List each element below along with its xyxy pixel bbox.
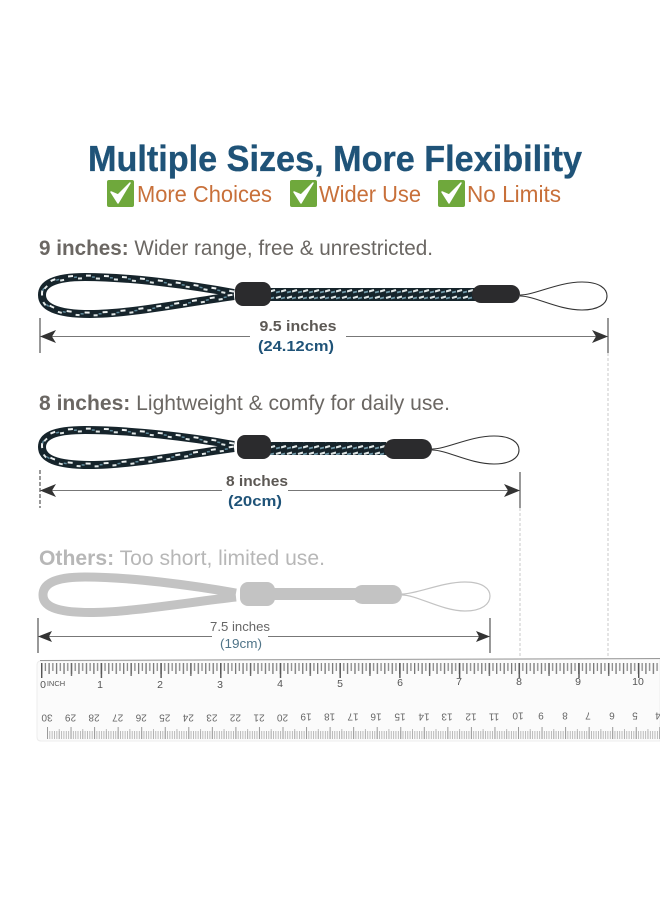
guide: dashed reference lines xyxy=(520,353,608,656)
inch scale numbers: 5 xyxy=(337,678,343,690)
centimetre scale numbers: 23 xyxy=(206,712,217,722)
centimetre scale numbers: 8 xyxy=(562,710,568,720)
centimetre scale numbers: 6 xyxy=(609,710,615,720)
icon: check wider use xyxy=(290,180,317,207)
panel: 9 inch strap xyxy=(39,237,608,355)
label: 7.5 inches xyxy=(210,619,271,653)
label: 9.5 inches: 9.5 inches xyxy=(260,318,336,335)
inch scale numbers xyxy=(40,676,644,691)
text: more choices: More Choices xyxy=(137,181,272,207)
icon: check more choices xyxy=(107,180,134,207)
ruler xyxy=(37,658,660,741)
centimetre scale numbers: 21 xyxy=(253,712,265,722)
heading: 8 inches: 8 inches: Lightweight & comfy for daily use. xyxy=(39,392,450,415)
inch scale numbers: 8 xyxy=(516,676,522,688)
inch scale numbers: 7 xyxy=(456,676,462,688)
text: wider use: Wider Use xyxy=(319,181,421,207)
strap: others xyxy=(43,577,490,612)
heading: 9 inches: 9 inches: Wider range, free & unrestricted. xyxy=(39,237,433,260)
strap: 8 inch xyxy=(42,429,519,466)
inch scale numbers: 3 xyxy=(217,679,223,691)
text: no limits: No Limits xyxy=(467,181,561,207)
inch scale numbers: 0 xyxy=(40,679,46,691)
centimetre scale numbers: 25 xyxy=(159,712,170,722)
centimetre scale numbers xyxy=(41,710,660,722)
panel: 8 inch strap xyxy=(39,392,520,510)
centimetre scale numbers: 12 xyxy=(465,710,477,722)
centimetre scale numbers: 19 xyxy=(300,710,312,722)
ruler body xyxy=(37,659,660,741)
dimension arrow: 9.5 inches xyxy=(40,318,608,353)
centimetre scale numbers: 13 xyxy=(441,710,453,722)
centimetre scale numbers: 16 xyxy=(370,710,382,722)
centimetre tick marks xyxy=(46,726,660,741)
subtitle benefits row xyxy=(107,180,561,207)
label: 8 inches: 8 inches xyxy=(226,473,288,490)
centimetre scale numbers: 29 xyxy=(65,712,76,722)
strap: 9 inch xyxy=(42,276,607,315)
inch scale numbers: 10 xyxy=(632,676,644,688)
inch scale numbers: INCH xyxy=(47,679,65,688)
label: 9.5 inches: (24.12cm) xyxy=(258,338,334,355)
label: 9.5 inches xyxy=(250,318,346,355)
centimetre scale numbers: 11 xyxy=(488,710,499,722)
centimetre scale numbers: 24 xyxy=(182,712,194,722)
centimetre scale numbers: 10 xyxy=(512,710,524,720)
label: 8 inches xyxy=(222,473,288,510)
centimetre scale numbers: 18 xyxy=(324,710,335,722)
inch tick marks xyxy=(40,660,660,680)
centimetre scale numbers: 22 xyxy=(229,712,241,722)
centimetre scale numbers: 15 xyxy=(394,710,406,722)
inch scale numbers: 9 xyxy=(575,676,581,688)
inch scale numbers: 6 xyxy=(397,677,403,689)
centimetre scale numbers: 5 xyxy=(632,710,638,720)
centimetre scale numbers: 20 xyxy=(277,712,288,722)
centimetre scale numbers: 7 xyxy=(585,710,591,720)
centimetre scale numbers: 9 xyxy=(538,710,544,720)
centimetre scale numbers: 17 xyxy=(347,710,359,722)
label: 7.5 inches: (19cm) xyxy=(220,636,262,651)
title: Multiple Sizes, More Flexibility xyxy=(88,138,582,179)
centimetre scale numbers: 28 xyxy=(88,712,100,722)
panel: other straps xyxy=(38,547,490,653)
centimetre scale numbers: 30 xyxy=(41,712,53,722)
label: 7.5 inches: 7.5 inches xyxy=(210,619,271,634)
dimension arrow: 7.5 inches xyxy=(38,618,490,653)
centimetre scale numbers: 26 xyxy=(135,712,147,722)
label: 8 inches: (20cm) xyxy=(228,493,282,510)
heading: others: Others: Too short, limited use. xyxy=(39,547,325,570)
dimension arrow: 8 inches xyxy=(40,470,520,508)
inch scale numbers: 2 xyxy=(157,679,163,691)
centimetre scale numbers: 27 xyxy=(112,712,123,722)
inch scale numbers: 4 xyxy=(277,678,283,690)
centimetre scale numbers: 14 xyxy=(418,710,430,722)
icon: check no limits xyxy=(438,180,465,207)
inch scale numbers: 1 xyxy=(97,679,103,691)
